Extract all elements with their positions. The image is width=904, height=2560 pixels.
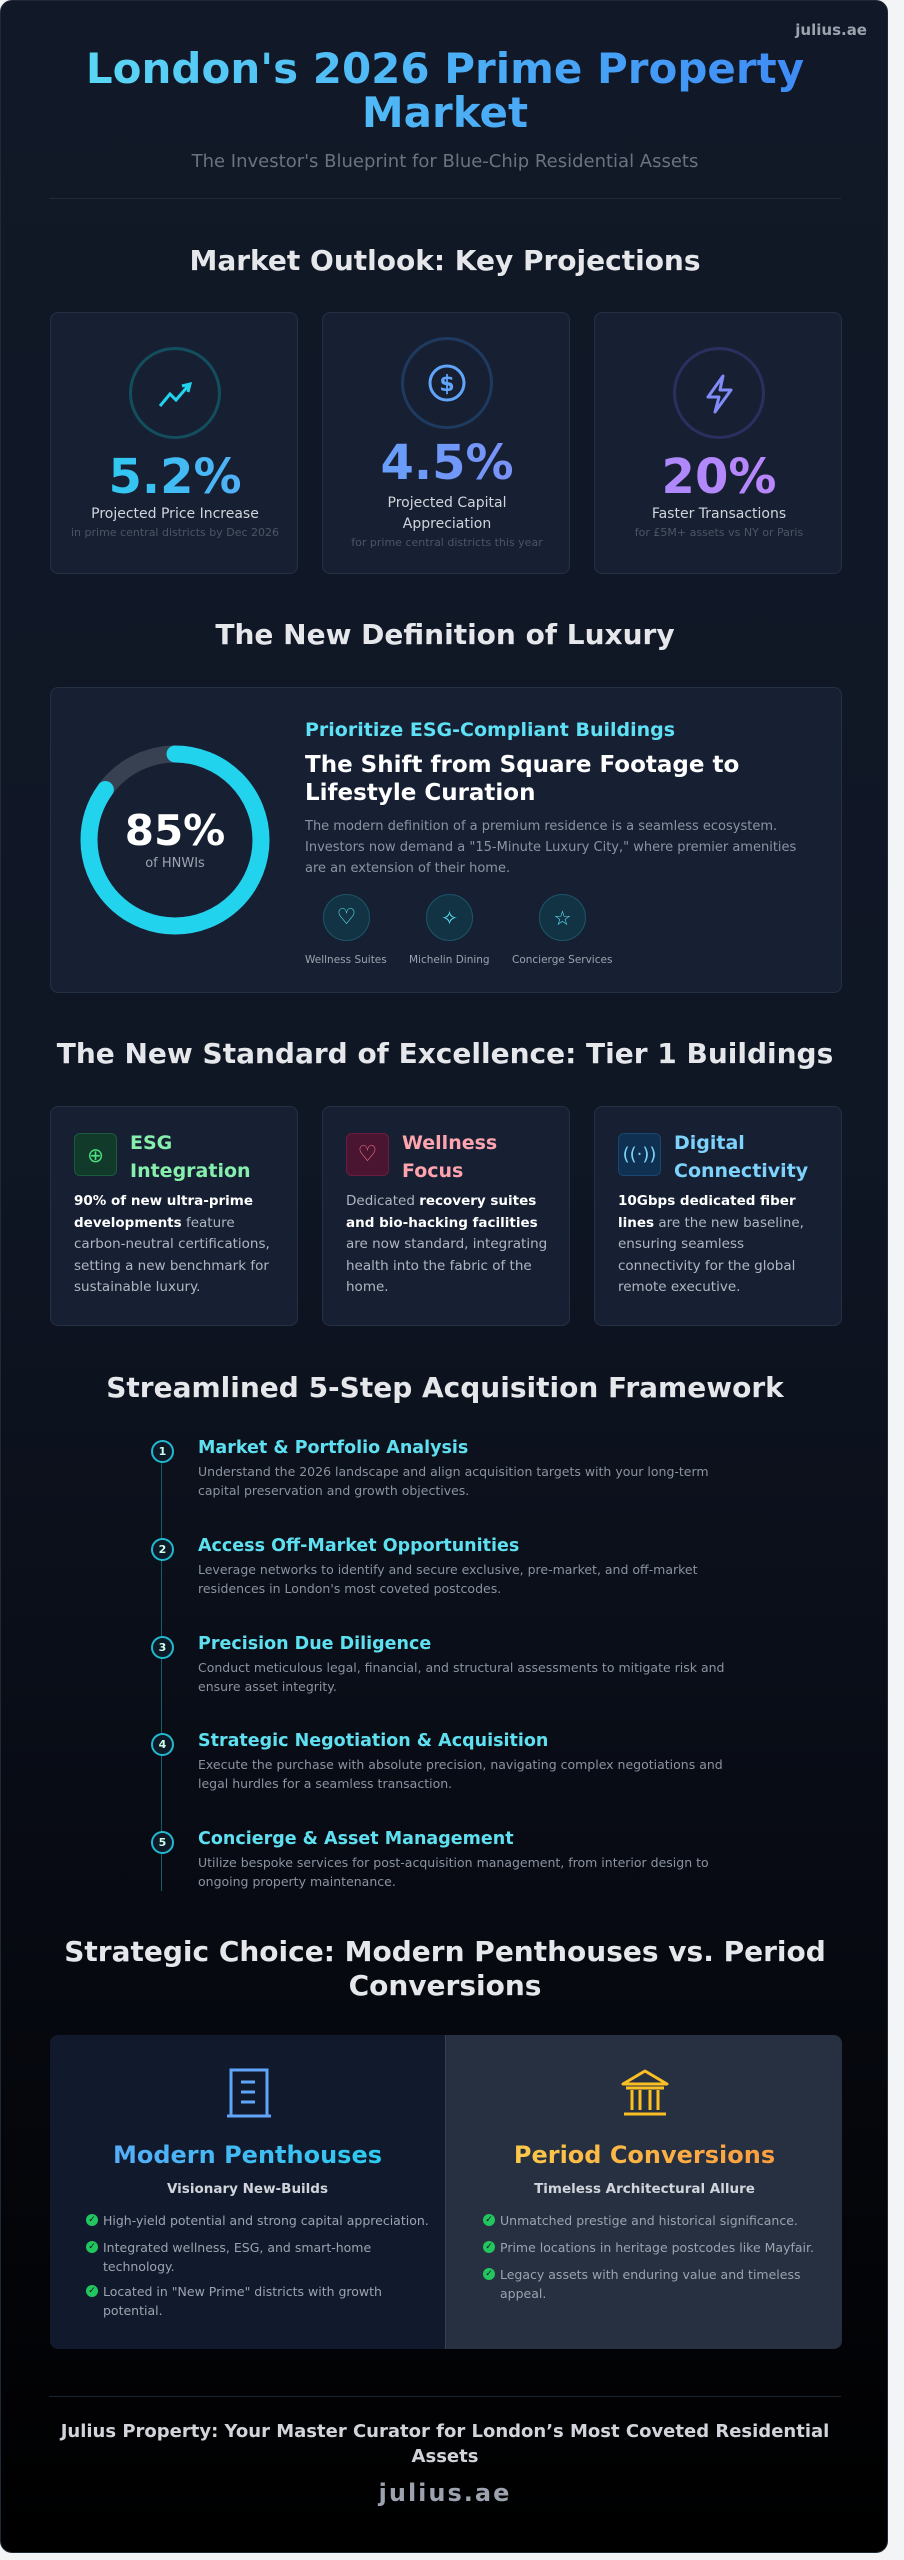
- panel: luxury: [50, 687, 842, 993]
- footer brand: julius.ae: [379, 2479, 511, 2507]
- donut chart 85%: of HNWIs: [145, 856, 205, 871]
- amenity icons: ✧: [441, 906, 458, 930]
- heading: market outlook: Market Outlook: Key Projections: [189, 244, 701, 277]
- panel: ESG: 90% of new ultra-prime developments feature carbon-neutral certifications, setting a new benchmark for sustainable luxury.: [74, 1193, 270, 1295]
- panel: ESG: Integration: [130, 1160, 251, 1182]
- panel: ESG: ⊕: [87, 1143, 104, 1167]
- panel: digital: 10Gbps dedicated fiber lines are the new baseline, ensuring seamless connectivity for the global remote executive.: [618, 1193, 804, 1295]
- step 2: 2: [159, 1543, 166, 1556]
- panel: wellness: ♡: [358, 1142, 377, 1167]
- heading: strategic choice: Conversions: [349, 1969, 541, 2002]
- brand top right: julius.ae: [795, 21, 867, 39]
- panel: stat 2: for prime central districts this year: [351, 536, 543, 549]
- heading: luxury: The New Definition of Luxury: [215, 618, 675, 651]
- column: modern: Located in "New Prime" districts with growth potential.: [103, 2284, 382, 2318]
- heading: 5 steps: Streamlined 5-Step Acquisition Framework: [106, 1371, 784, 1404]
- panel: stat 2: [322, 312, 570, 574]
- panel: stat 1: [50, 312, 298, 574]
- timeline: Market & Portfolio Analysis: [198, 1438, 468, 1458]
- column: period: [445, 2035, 842, 2349]
- footer tagline: Julius Property: Your Master Curator for London’s Most Coveted Residential Assets: [61, 2421, 829, 2467]
- panel: stat 2: Projected Capital: [388, 495, 506, 511]
- panel: stat 3: Faster Transactions: [652, 506, 786, 522]
- text block: Prioritize ESG-Compliant Buildings: [305, 719, 675, 741]
- text block: Lifestyle Curation: [305, 780, 535, 806]
- panel: ESG: ESG: [130, 1132, 172, 1154]
- heading: strategic choice: Strategic Choice: Modern Penthouses vs. Period: [64, 1935, 826, 1968]
- panel: stat 1: in prime central districts by Dec 2026: [71, 526, 279, 539]
- panel: wellness: Dedicated recovery suites and bio-hacking facilities are now standard, integrating health into the fabric of the home.: [346, 1193, 547, 1295]
- panel: digital: Connectivity: [674, 1160, 808, 1182]
- icon: lightning: [673, 347, 765, 439]
- panel: stat 3: for £5M+ assets vs NY or Paris: [635, 526, 803, 539]
- stat number: 4.5%: [380, 435, 514, 491]
- column: period: ✓: [485, 2215, 493, 2225]
- timeline: Precision Due Diligence: [198, 1634, 431, 1654]
- subtitle: The Investor's Blueprint for Blue-Chip Residential Assets: [192, 151, 698, 172]
- step 3: [151, 1636, 174, 1659]
- text block: The Shift from Square Footage to: [305, 752, 739, 778]
- stat number: [51, 449, 299, 505]
- amenity icons: ☆: [554, 906, 571, 930]
- timeline: Concierge & Asset Management: [198, 1829, 514, 1849]
- stat number: [595, 449, 843, 505]
- column: period: Unmatched prestige and historical significance.: [500, 2213, 798, 2228]
- stat number: [323, 435, 571, 491]
- timeline: Access Off-Market Opportunities: [198, 1536, 519, 1556]
- panel: ESG: [50, 1106, 298, 1326]
- text block: The modern definition of a premium residence is a seamless ecosystem. Investors now demand a "15-Minute Luxury City," where premier amenities are an extension of their home.: [305, 819, 796, 876]
- column: modern: Integrated wellness, ESG, and smart-home technology.: [103, 2240, 371, 2274]
- column: modern: ✓: [88, 2286, 96, 2296]
- panel: wellness: Wellness: [402, 1132, 497, 1154]
- icon: trend: [129, 347, 221, 439]
- step 2: [151, 1538, 174, 1561]
- donut chart 85%: [80, 746, 270, 934]
- panel: digital: Digital: [674, 1132, 745, 1154]
- timeline: Conduct meticulous legal, financial, and structural assessments to mitigate risk and ensure asset integrity.: [198, 1660, 724, 1694]
- stat number: 20%: [662, 449, 776, 505]
- column: period: Legacy assets with enduring value and timeless appeal.: [500, 2267, 800, 2301]
- column: modern: High-yield potential and strong capital appreciation.: [103, 2213, 429, 2228]
- step 1: 1: [159, 1445, 166, 1458]
- timeline: Strategic Negotiation & Acquisition: [198, 1731, 548, 1751]
- amenity icons: ♡: [337, 905, 356, 930]
- heading: strategic choice: [64, 1935, 826, 2002]
- panel: digital: [594, 1106, 842, 1326]
- amenity icons: [305, 894, 612, 966]
- column: modern: [50, 2035, 445, 2349]
- panel: wellness: [322, 1106, 570, 1326]
- step 4: 4: [159, 1738, 166, 1751]
- panel: luxury: Wellness Suites: [305, 954, 387, 966]
- column: modern: ✓: [88, 2215, 96, 2225]
- step 4: [151, 1733, 174, 1756]
- column: period: Period Conversions: [514, 2141, 775, 2169]
- column: period: ✓: [485, 2269, 493, 2279]
- column: modern: Modern Penthouses: [113, 2141, 382, 2169]
- panel: stat 2: Appreciation: [403, 516, 491, 532]
- panel: digital: ((·)): [623, 1144, 656, 1165]
- panel: wellness: Focus: [402, 1160, 463, 1182]
- icon: dollar: $: [439, 372, 455, 397]
- step 3: 3: [159, 1641, 166, 1654]
- title: Market: [362, 88, 528, 137]
- panel: luxury: Concierge Services: [512, 954, 612, 966]
- step 5: 5: [159, 1836, 166, 1849]
- timeline: Understand the 2026 landscape and align acquisition targets with your long-term capital preservation and growth objectives.: [198, 1464, 709, 1498]
- title: London's 2026 Prime Property: [86, 44, 804, 93]
- column: period: ✓: [485, 2242, 493, 2252]
- column: period: Prime locations in heritage postcodes like Mayfair.: [500, 2240, 814, 2255]
- panel: stat 3: [594, 312, 842, 574]
- timeline: Execute the purchase with absolute precision, navigating complex negotiations and legal hurdles for a seamless transaction.: [198, 1757, 723, 1791]
- column: modern: ✓: [88, 2242, 96, 2252]
- text block: [304, 719, 796, 876]
- timeline: Utilize bespoke services for post-acquisition management, from interior design to ongoing property maintenance.: [198, 1855, 709, 1889]
- panel: stat 1: Projected Price Increase: [91, 506, 259, 522]
- title: [1, 47, 889, 135]
- timeline: Leverage networks to identify and secure exclusive, pre-market, and off-market residences in London's most coveted postcodes.: [198, 1562, 698, 1596]
- heading: tier 1: The New Standard of Excellence: Tier 1 Buildings: [57, 1037, 833, 1070]
- donut chart 85%: 85%: [125, 806, 225, 855]
- step 5: [151, 1831, 174, 1854]
- column: period: Timeless Architectural Allure: [534, 2181, 755, 2197]
- comparison panel: [50, 2035, 842, 2349]
- panel: luxury: Michelin Dining: [409, 954, 490, 966]
- icon: dollar: [401, 337, 493, 429]
- column: modern: Visionary New-Builds: [167, 2181, 328, 2197]
- step 1: [151, 1440, 174, 1463]
- stat number: 5.2%: [108, 449, 242, 505]
- timeline: [151, 1438, 724, 1891]
